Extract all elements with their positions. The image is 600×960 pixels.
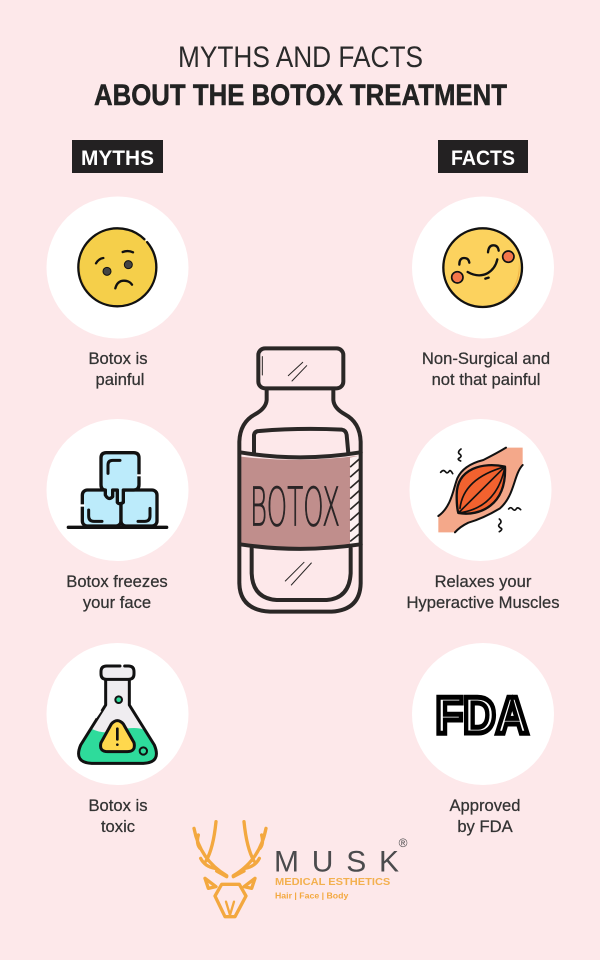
panel: myth freezes [46, 419, 188, 612]
title: ABOUT THE BOTOX TREATMENT [94, 79, 507, 112]
label: by FDA [457, 817, 514, 836]
icon: ice cubes [68, 453, 167, 527]
wordmark: MUSK [274, 846, 399, 879]
panel: myth painful [46, 196, 188, 389]
icon: FDA logo: FDA [436, 687, 528, 745]
illustration: botox bottle [239, 348, 361, 612]
label: painful [96, 370, 144, 389]
label: your face [83, 593, 151, 612]
panel: fact FDA [412, 643, 554, 836]
label: Relaxes your [435, 572, 531, 591]
panel: fact muscles [406, 419, 560, 612]
icon: flask [79, 666, 156, 763]
title [94, 41, 507, 112]
icon: muscle [438, 448, 523, 532]
logo icon: deer [194, 822, 266, 917]
label: Hyperactive Muscles [406, 593, 560, 612]
heading: myths: MYTHS [81, 147, 154, 170]
label: not that painful [432, 370, 540, 389]
icon: happy face [443, 228, 522, 307]
heading: facts: FACTS [451, 147, 515, 170]
icon: sad face [78, 228, 156, 306]
services line: Hair | Face | Body [275, 891, 349, 900]
logo: musk medical esthetics [194, 822, 408, 917]
illustration: botox bottle: BOTOX [250, 475, 340, 538]
registered mark: ® [399, 836, 408, 850]
panel: myth toxic [46, 643, 188, 836]
label: Non-Surgical and [422, 349, 550, 368]
label: Botox freezes [66, 572, 168, 591]
label: Botox is [88, 796, 148, 815]
panel: fact non-surgical [412, 196, 554, 389]
label: Approved [449, 796, 521, 815]
tagline: MEDICAL ESTHETICS [275, 877, 391, 888]
heading: facts [438, 140, 528, 173]
label: toxic [101, 817, 135, 836]
label: Botox is [88, 349, 148, 368]
heading: myths [72, 140, 163, 173]
title: MYTHS AND FACTS [178, 41, 423, 74]
